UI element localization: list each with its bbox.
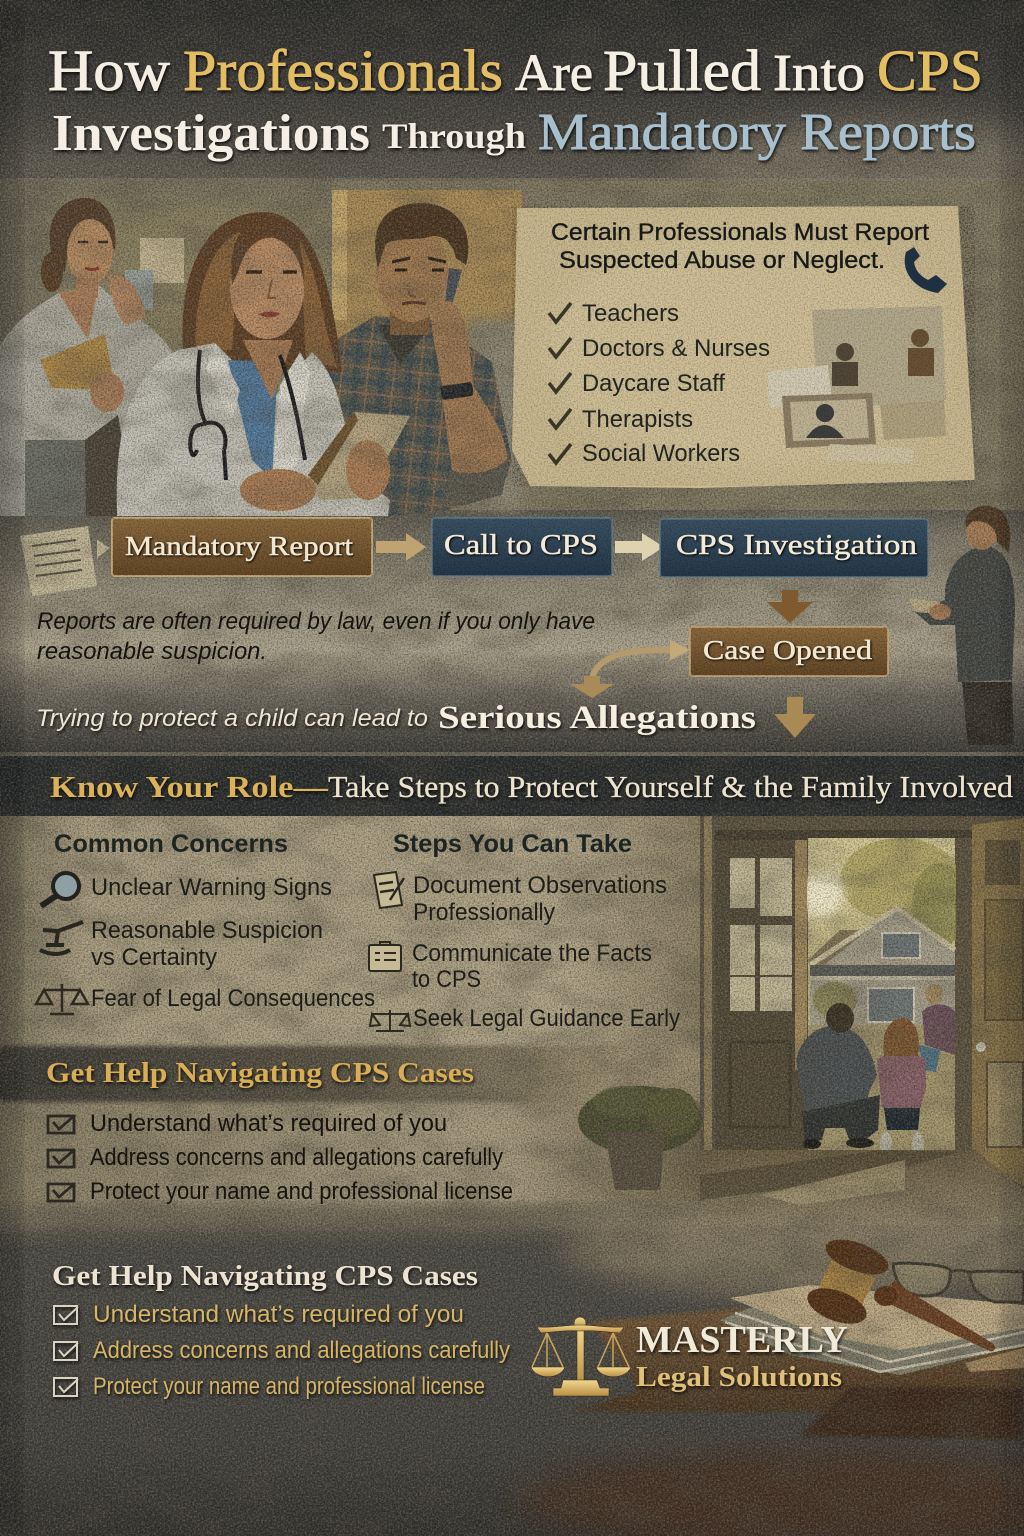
section heading: know your role: Know Your Role— xyxy=(50,769,329,804)
item: reasonable suspicion: Reasonable Suspicion xyxy=(91,917,323,944)
figure: young girl seen from behind xyxy=(877,1018,926,1158)
flow: mandatory report to case opened xyxy=(112,518,928,738)
text: serious allegations warning: Serious Allegations xyxy=(438,700,756,736)
footer checklist in gold: Understand what’s required of you xyxy=(93,1301,464,1328)
checklist of professions xyxy=(549,300,770,467)
icon: telephone handset xyxy=(905,247,947,293)
outdoor scene xyxy=(800,838,968,1150)
step: case opened: Case Opened xyxy=(703,635,873,665)
text: serious allegations warning: Trying to protect a child can lead to xyxy=(36,705,428,732)
icon: footer checkboxes xyxy=(54,1306,78,1396)
icon: tilted balance xyxy=(40,922,83,954)
left door with window panes xyxy=(715,840,807,1150)
item: communicate the facts: to CPS xyxy=(412,966,481,993)
arrow xyxy=(376,533,426,561)
checklist of professions: Teachers xyxy=(582,300,679,327)
checklist: get help items: Understand what’s required of you xyxy=(90,1110,447,1137)
section heading: know your role xyxy=(50,769,1014,804)
column heading: Common Concerns xyxy=(54,830,288,858)
icon: clipboard xyxy=(369,942,401,971)
figure: seated woman outside xyxy=(918,984,955,1072)
icon: scales of justice xyxy=(36,984,88,1014)
title line two: Investigations xyxy=(52,105,370,162)
icon: gold scales of justice xyxy=(531,1317,631,1396)
text: legal note: reasonable suspicion. xyxy=(37,638,267,665)
footer checklist in gold xyxy=(54,1301,510,1400)
wall and corkboard behind people xyxy=(0,181,522,516)
arrow xyxy=(615,533,664,561)
title line two xyxy=(52,104,976,162)
doorstep floor xyxy=(700,1150,1024,1225)
figure: main doctor with stethoscope xyxy=(117,212,410,516)
paper sheet xyxy=(512,206,975,488)
icon: magnifying glass xyxy=(41,873,79,906)
item: seek legal guidance: Seek Legal Guidance Early xyxy=(413,1005,680,1032)
arrow down to allegations xyxy=(774,697,816,738)
stack of papers xyxy=(720,1285,1024,1375)
title line one xyxy=(48,38,983,103)
column: common concerns xyxy=(36,830,375,1014)
title line one: Are xyxy=(515,45,593,102)
panel heading: Certain Professionals Must Report xyxy=(551,219,929,246)
footer checklist in gold: Address concerns and allegations carefully xyxy=(93,1337,510,1364)
panel: certain professionals must report xyxy=(512,206,975,488)
title line one: CPS xyxy=(877,38,983,103)
icon: document and pen xyxy=(374,872,404,908)
item: unclear warning signs: Unclear Warning Signs xyxy=(91,874,332,901)
title line two: Mandatory Reports xyxy=(538,104,976,161)
checklist of professions: Social Workers xyxy=(582,440,740,467)
checklist of professions: Therapists xyxy=(582,406,693,433)
curved arrow to case opened xyxy=(570,640,690,698)
title line one: Pulled xyxy=(603,38,761,103)
footer heading: get help navigating: Get Help Navigating CPS Cases xyxy=(52,1261,478,1292)
step: call to CPS: Call to CPS xyxy=(444,530,598,561)
icon: scales with book xyxy=(370,1010,410,1031)
illustration: potted plant xyxy=(578,1086,702,1190)
illustration: gavel, papers and glasses on desk xyxy=(570,1233,1024,1440)
panel subheading: Suspected Abuse or Neglect. xyxy=(559,247,885,274)
checklist of professions: Doctors & Nurses xyxy=(582,335,770,362)
hero illustration: three professionals xyxy=(0,181,522,516)
step: CPS investigation xyxy=(660,519,928,577)
title line one: Professionals xyxy=(183,38,503,103)
text: legal note: Reports are often required by law, even if you only have xyxy=(37,608,595,635)
step: mandatory report xyxy=(112,518,372,576)
section heading: get help navigating: Get Help Navigating CPS Cases xyxy=(46,1058,474,1089)
item: fear of legal consequences: Fear of Legal Consequences xyxy=(91,985,375,1012)
section heading: know your role: Take Steps to Protect Yourself & the Family Involved xyxy=(328,769,1014,804)
checklist: get help items: Address concerns and allegations carefully xyxy=(90,1144,503,1171)
checklist: get help items: Protect your name and professional license xyxy=(90,1178,513,1205)
item: reasonable suspicion xyxy=(91,917,323,971)
step: CPS investigation: CPS Investigation xyxy=(676,530,917,561)
door frame xyxy=(700,816,1024,1196)
text: legal note xyxy=(37,608,595,665)
logo: masterly legal solutions xyxy=(531,1317,848,1396)
gavel xyxy=(803,1233,992,1348)
checklist: get help items xyxy=(48,1110,513,1205)
illustration: family at open door xyxy=(700,816,1024,1225)
figure: nurse in background xyxy=(0,198,172,516)
wooden desk xyxy=(570,1300,1024,1440)
text: serious allegations warning xyxy=(36,700,756,736)
illustration: caseworker with tablet xyxy=(908,506,1015,745)
step: mandatory report: Mandatory Report xyxy=(125,531,354,561)
right jamb and door xyxy=(956,818,1024,1186)
title line one: How xyxy=(48,38,170,103)
title xyxy=(48,38,983,162)
step: call to CPS xyxy=(432,518,612,576)
illustration: case files and photos xyxy=(767,306,946,464)
wordmark: MASTERLY xyxy=(636,1319,848,1361)
illustration: report paper xyxy=(20,526,110,596)
checklist of professions: Daycare Staff xyxy=(582,370,725,397)
column heading: Steps You Can Take xyxy=(393,830,632,858)
item: reasonable suspicion: vs Certainty xyxy=(91,944,217,971)
item: document observations: Professionally xyxy=(413,899,555,926)
tagline: Legal Solutions xyxy=(636,1362,842,1393)
arrow down xyxy=(767,590,813,623)
title line two: Through xyxy=(382,116,526,156)
item: document observations: Document Observations xyxy=(413,872,667,899)
footer checklist in gold: Protect your name and professional license xyxy=(93,1373,485,1400)
figure: crouching man seen from behind xyxy=(796,1003,880,1149)
item: communicate the facts: Communicate the Facts xyxy=(412,940,652,967)
title line one: Into xyxy=(773,45,865,102)
step: case opened xyxy=(690,627,888,676)
figure: man on the phone xyxy=(315,203,512,516)
column: steps you can take xyxy=(369,830,680,1032)
eyeglasses xyxy=(893,1263,1024,1302)
icon: checkboxes xyxy=(48,1116,74,1201)
item: document observations xyxy=(413,872,667,926)
item: communicate the facts xyxy=(412,940,652,993)
